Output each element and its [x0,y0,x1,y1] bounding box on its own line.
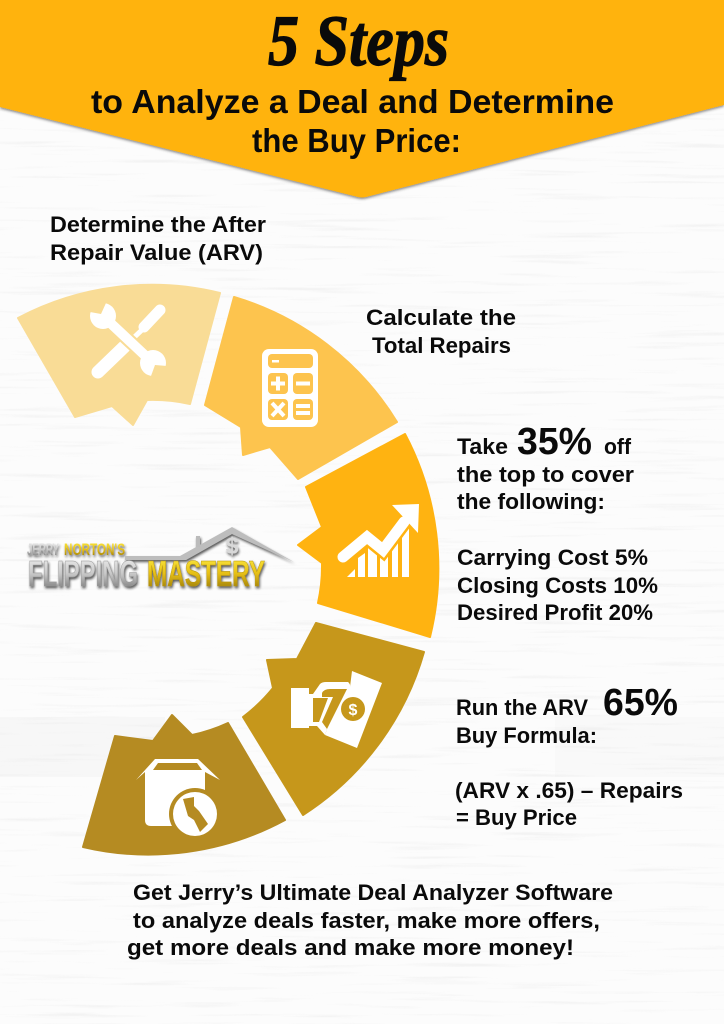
65 percent figure: 65% [603,682,678,724]
step 4 label: Run the ARV [456,695,588,720]
subtitle [91,83,614,159]
closing call to action [127,880,613,960]
segment shape [83,715,285,855]
step 2 label: Total Repairs [372,333,511,358]
logo top line: JERRY [27,540,59,559]
step 3 label: off [604,434,632,459]
logo bottom line: FLIPPING [28,553,138,594]
step 1 segment: ARV [18,285,220,425]
step 2 label: Calculate the [366,305,516,330]
icon: calculator [262,349,318,427]
step 3 segment: 35 percent [298,434,438,637]
banner shape [0,0,724,198]
logo top line [27,540,125,559]
segment shape [243,623,424,815]
icon: software box with disc [136,759,221,840]
logo: Jerry Norton's Flipping Mastery [27,527,294,594]
dollar sign: $ [349,702,358,719]
step 4 segment: buy formula [243,623,424,815]
logo bottom line: MASTERY [147,553,265,594]
icon: wrench and screwdriver [88,296,168,382]
step 1 label [50,212,266,265]
step 3 label: Take [457,434,508,459]
segment shape [205,297,397,479]
segment shape [18,285,220,425]
step 2 label [366,305,516,358]
icon: rising chart arrow [343,504,419,577]
closing call to action: Get Jerry’s Ultimate Deal Analyzer Software [133,880,613,905]
step 3 label: Carrying Cost 5% [457,545,648,570]
step 3 label: the following: [457,489,605,514]
step 5 segment: software [83,715,285,855]
step 4 label: (ARV x .65) – Repairs [455,778,683,803]
step 3 label: Closing Costs 10% [457,573,658,598]
step 3 label [457,421,658,625]
roof with dollar sign: $ [226,533,239,559]
step 3 label: Desired Profit 20% [457,600,653,625]
closing call to action: to analyze deals faster, make more offers, [133,908,600,933]
closing call to action: get more deals and make more money! [127,935,574,960]
step 4 label: = Buy Price [456,805,577,830]
step 2 segment: repairs [205,297,397,479]
step 1 label: Determine the After [50,212,266,237]
subtitle: to Analyze a Deal and Determine [91,83,614,120]
step 1 label: Repair Value (ARV) [50,240,263,265]
segment shape [298,434,438,637]
title: 5 Steps: 5 Steps [268,1,449,81]
35 percent figure: 35% [517,421,592,463]
step 4 label: Buy Formula: [456,723,597,748]
roof with dollar sign [125,527,294,562]
icon: hand with money [291,671,382,748]
step 4 label [455,682,683,830]
logo top line: NORTON'S [64,540,125,559]
header banner [0,0,724,198]
step 3 label: the top to cover [457,462,634,487]
subtitle: the Buy Price: [252,122,461,159]
